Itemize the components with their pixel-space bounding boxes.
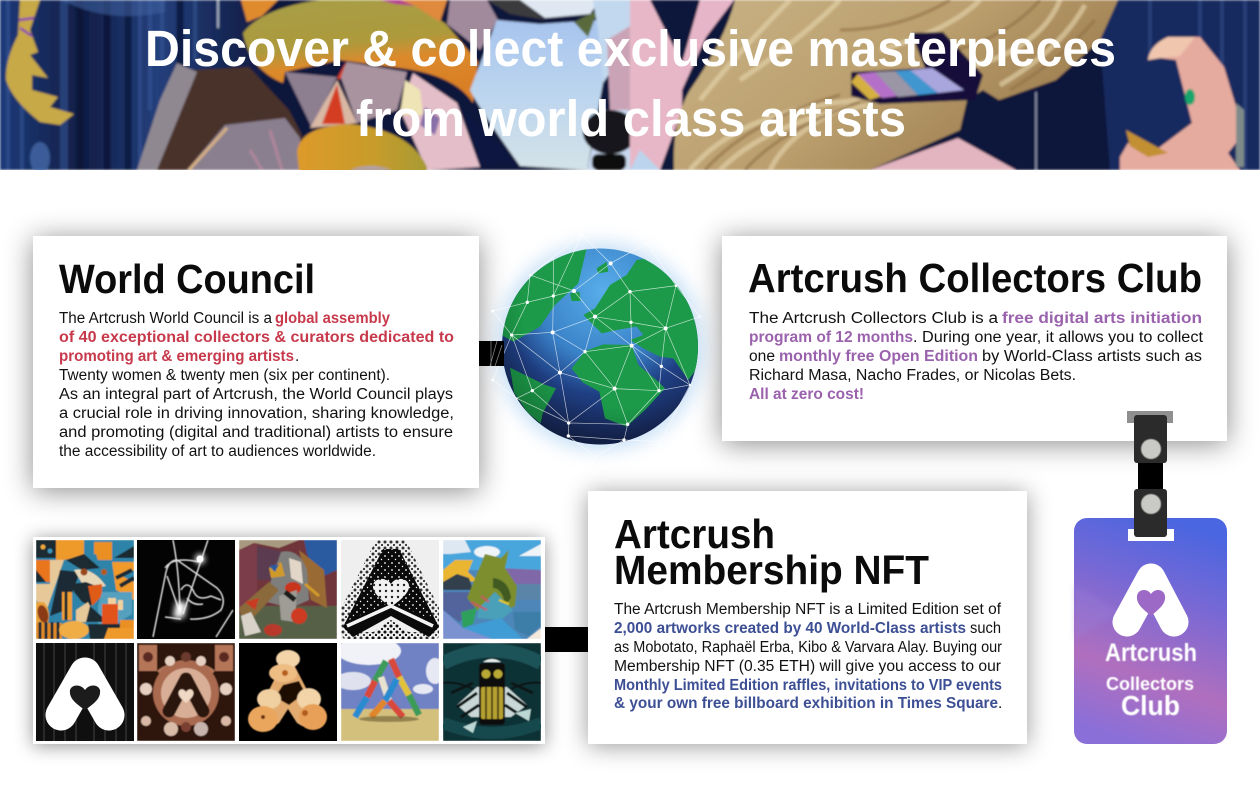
text block: collectors club: one xyxy=(749,348,775,365)
badge: collectors club xyxy=(1074,411,1227,744)
artwork 10: beetle xyxy=(443,643,541,741)
heading: membership nft: Membership NFT xyxy=(614,547,929,593)
text block: collectors club: . During one year, it allows you to collect xyxy=(913,329,1204,346)
connector: artworks to membership xyxy=(543,627,589,652)
text block: world council: The Artcrush World Council is a xyxy=(59,310,272,327)
text block: world council: promoting art & emerging artists xyxy=(59,348,294,365)
title: Discover & collect exclusive masterpieces xyxy=(145,20,1116,77)
panel: artwork grid xyxy=(33,537,545,744)
badge text: Club xyxy=(1121,690,1180,721)
text block: world council: Twenty women & twenty men (six per continent). xyxy=(59,367,390,384)
text block: membership nft: Membership NFT (0.35 ETH) will give you access to our xyxy=(614,658,1001,675)
decorative lower croissant xyxy=(296,122,428,170)
badge text: Artcrush xyxy=(1105,639,1197,667)
text block: membership nft: 2,000 artworks created by 40 World-Class artists xyxy=(614,620,966,637)
decorative fruit xyxy=(243,0,478,103)
text block: world council xyxy=(59,310,454,460)
artwork 3: figurative painting xyxy=(239,540,337,639)
text block: collectors club: The Artcrush Collectors Club is a xyxy=(749,310,998,327)
text block: membership nft: Monthly Limited Edition raffles, invitations to VIP events xyxy=(614,677,1002,694)
logo: artcrush A with heart xyxy=(1127,578,1174,622)
artwork 4: halftone A xyxy=(341,540,439,639)
text block: membership nft xyxy=(614,601,1002,712)
hair xyxy=(674,0,1118,170)
decorative pink and navy shards xyxy=(630,0,682,170)
panel: collectors club xyxy=(722,236,1227,441)
badge clip xyxy=(1127,411,1173,537)
decorative claw xyxy=(6,0,74,125)
text block: world council: As an integral part of Artcrush, the World Council plays xyxy=(59,386,453,403)
badge text xyxy=(1105,639,1197,721)
text block: world council: a crucial role in driving innovation, sharing knowledge, xyxy=(59,405,454,422)
text block: world council: of 40 exceptional collectors & curators dedicated to xyxy=(59,329,454,346)
text block: collectors club: program of 12 months xyxy=(749,329,913,346)
badge slot xyxy=(1128,529,1174,541)
artwork 2: light trails xyxy=(137,540,235,639)
text block: collectors club: free digital arts initiation xyxy=(1002,310,1202,327)
heading: membership nft: Artcrush xyxy=(614,511,775,557)
icon: globe with network xyxy=(491,234,705,458)
banner artwork xyxy=(0,0,1260,180)
artwork 6: black and white A xyxy=(36,643,134,741)
text block: collectors club xyxy=(749,310,1204,403)
heading: world council: World Council xyxy=(59,256,315,302)
text block: world council: the accessibility of art to audiences worldwide. xyxy=(59,443,376,460)
text block: membership nft: such xyxy=(970,620,1001,637)
panel: world council xyxy=(33,236,479,488)
decorative white-blue figure xyxy=(470,20,603,170)
heading: membership nft xyxy=(614,511,929,593)
text block: world council: and promoting (digital and traditional) artists to ensure xyxy=(59,424,453,441)
rainbow stripe xyxy=(851,74,882,100)
heading: collectors club: Artcrush Collectors Club xyxy=(748,255,1202,301)
title xyxy=(145,20,1116,147)
text block: collectors club: Richard Masa, Nacho Frades, or Nicolas Bets. xyxy=(749,367,1076,384)
artwork 5: landscape A xyxy=(443,540,541,639)
text block: collectors club: All at zero cost! xyxy=(749,386,864,403)
artwork 9: colourful A sculpture xyxy=(341,643,439,741)
title: from world class artists xyxy=(356,90,906,147)
text block: membership nft: & your own free billboard exhibition in Times Square xyxy=(614,695,998,712)
decorative pink hand xyxy=(1120,37,1244,170)
text block: collectors club: by World-Class artists such as xyxy=(982,348,1202,365)
artwork 7: ornate A xyxy=(137,643,235,741)
text block: collectors club: monthly free Open Edition xyxy=(779,348,978,365)
text block: membership nft: as Mobotato, Raphaël Erba, Kibo & Varvara Alay. Buying our xyxy=(614,639,1002,656)
panel: membership nft xyxy=(588,491,1027,744)
connector: council to globe xyxy=(479,341,504,366)
text block: membership nft: The Artcrush Membership NFT is a Limited Edition set of xyxy=(614,601,1002,618)
decorative black ball xyxy=(583,110,637,154)
decorative brown shape xyxy=(157,67,302,170)
artwork 1: cubist xyxy=(36,540,134,639)
text block: world council: global assembly xyxy=(275,310,390,327)
text block: membership nft: . xyxy=(998,695,1002,712)
badge text: Collectors xyxy=(1106,674,1194,694)
text block: world council: . xyxy=(295,348,299,365)
artwork 8: popcorn A xyxy=(239,643,337,741)
